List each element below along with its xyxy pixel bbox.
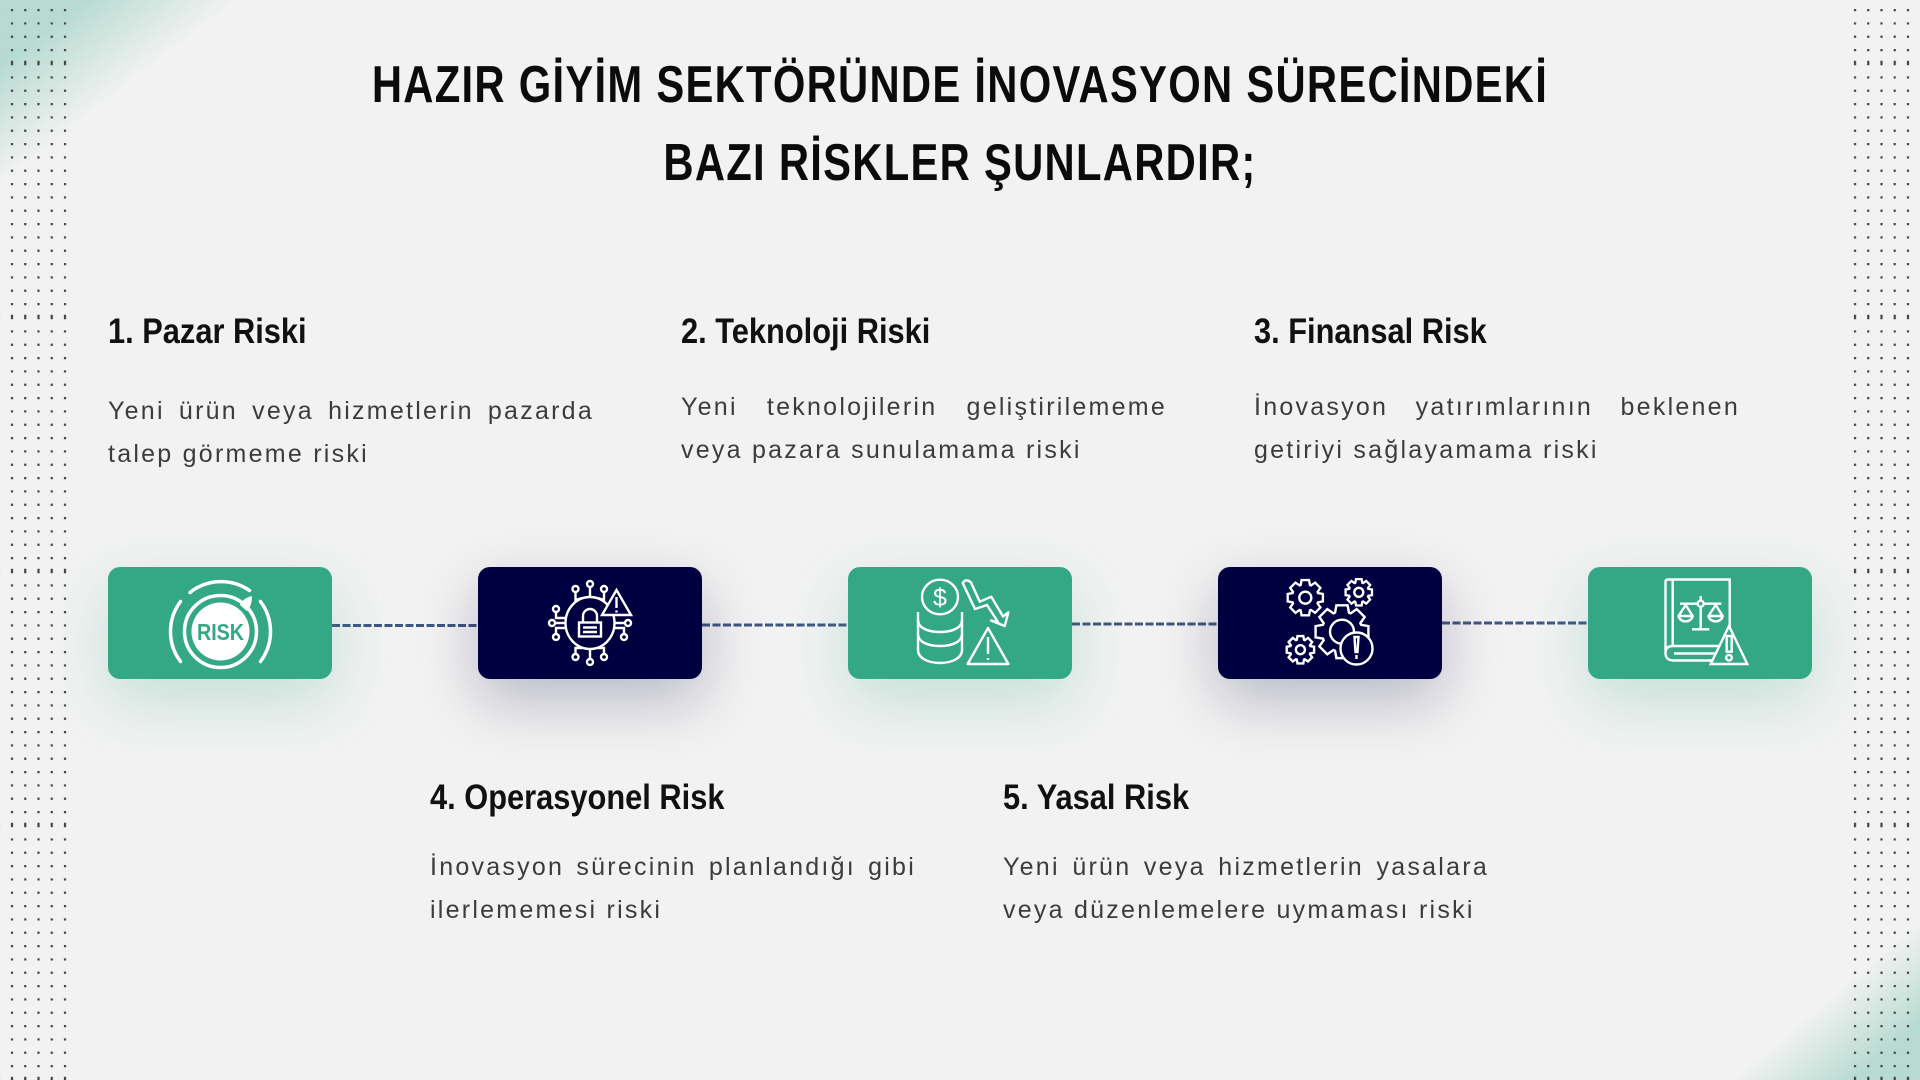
text: 3 xyxy=(1254,393,1740,464)
text: 3: İnovasyon yatırımlarının beklenen xyxy=(1254,393,1740,421)
heading: 1: 1. Pazar Riski xyxy=(108,312,307,351)
heading: 2: 2. Teknoloji Riski xyxy=(681,312,930,351)
title line 2: BAZI RİSKLER ŞUNLARDIR; xyxy=(663,134,1257,192)
text: 4: İnovasyon sürecinin planlandığı gibi xyxy=(430,853,916,881)
heading: 3: 3. Finansal Risk xyxy=(1254,312,1487,351)
text: 5 xyxy=(1003,853,1489,924)
text: 2: veya pazara sunulamama riski xyxy=(681,436,1082,464)
corner glow: top left xyxy=(0,0,240,185)
card: navy 4 xyxy=(1218,567,1442,679)
dot grid: right xyxy=(1854,9,1910,1080)
card: green 5 xyxy=(1588,567,1812,679)
card: green 3 xyxy=(848,567,1072,679)
heading: 5: 5. Yasal Risk xyxy=(1003,778,1189,817)
text: 4: ilerlememesi riski xyxy=(430,896,662,924)
title: HAZIR GİYİM SEKTÖRÜNDE İNOVASYON SÜRECİNDEKİ xyxy=(372,56,1548,114)
text: 1: talep görmeme riski xyxy=(108,440,369,468)
text: 4 xyxy=(430,853,916,924)
corner glow: bottom right xyxy=(1730,920,1920,1080)
text: 1: Yeni ürün veya hizmetlerin pazarda xyxy=(108,397,594,425)
heading: 4: 4. Operasyonel Risk xyxy=(430,778,724,817)
text: 5: veya düzenlemelere uymaması riski xyxy=(1003,896,1475,924)
card: navy 2 xyxy=(478,567,702,679)
icon: risk gauge: RISK xyxy=(197,619,244,645)
icon: coins falling: $ xyxy=(933,584,947,612)
text: 1 xyxy=(108,397,594,468)
text: 3: getiriyi sağlayamama riski xyxy=(1254,436,1599,464)
text: 2 xyxy=(681,393,1167,464)
dot grid: left xyxy=(0,9,66,1080)
text: 2: Yeni teknolojilerin geliştirilememe xyxy=(681,393,1167,421)
text: 5: Yeni ürün veya hizmetlerin yasalara xyxy=(1003,853,1489,881)
card: green 1 xyxy=(108,567,332,679)
